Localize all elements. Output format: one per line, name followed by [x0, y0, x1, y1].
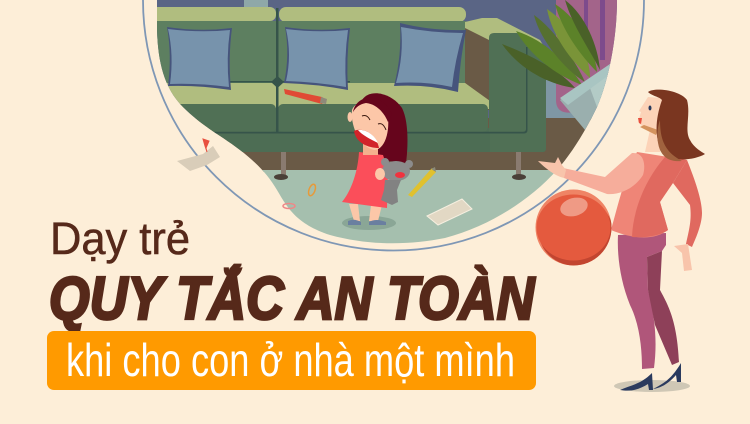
- scene: living room: [150, 0, 630, 250]
- cushion 2: [284, 27, 350, 90]
- girl ear: [348, 112, 352, 122]
- sofa: [150, 7, 546, 180]
- legs: [281, 152, 286, 176]
- woman hair highlight: [657, 120, 682, 161]
- woman eye: [648, 106, 652, 110]
- woman hand: [674, 244, 692, 271]
- cushion 1: [167, 27, 232, 90]
- olive seat right overlap: [465, 83, 471, 88]
- paper clip pink: [283, 204, 295, 208]
- paper clip: [307, 183, 317, 197]
- woman back leg: [647, 251, 679, 365]
- back line circle: [143, 0, 644, 250]
- woman mouth: [638, 118, 642, 124]
- girl neck: [363, 143, 378, 155]
- woman: [538, 90, 705, 392]
- wall: [150, 0, 630, 120]
- woman shadow: [614, 380, 690, 392]
- subtitle text: khi cho con ở nhà một mình: [66, 334, 515, 386]
- crumpled paper: [427, 199, 472, 225]
- skirting panel: [546, 80, 606, 120]
- woman shoes: [620, 373, 653, 391]
- arm top: [465, 18, 542, 44]
- girl eyes: [362, 116, 386, 130]
- sofa frame: [208, 128, 546, 152]
- title line 1: Dạy trẻ: [50, 213, 190, 264]
- woman front hand: [538, 157, 566, 178]
- girl: [342, 93, 407, 225]
- girl dress: [342, 152, 388, 208]
- red pencil: [284, 89, 327, 104]
- rug floor: [262, 170, 554, 244]
- girl hand: [375, 168, 385, 180]
- woman front leg: [618, 233, 666, 369]
- woman hair: [648, 90, 705, 159]
- girl shoes: [348, 220, 386, 225]
- woman front arm: [563, 153, 644, 194]
- girl shadow: [342, 216, 396, 230]
- title line 2: QUY TẮC AN TOÀN: [49, 265, 536, 332]
- window strip: [244, 0, 268, 7]
- front seam line: [214, 47, 528, 134]
- arm side: [465, 28, 490, 110]
- seat cushions: [166, 83, 276, 108]
- sofa back top: [150, 7, 276, 21]
- girl face: [352, 101, 388, 150]
- teddy bear: [381, 158, 413, 205]
- torn paper with pin: [177, 139, 220, 171]
- girl mouth: [354, 130, 379, 148]
- seat fronts: [180, 104, 276, 132]
- flower pot: [560, 64, 610, 130]
- woman torso: [611, 152, 687, 238]
- floor back: [195, 118, 592, 172]
- yellow pencil: [408, 167, 436, 197]
- curtain: [556, 0, 620, 113]
- girl legs: [349, 204, 382, 221]
- woman face: [638, 97, 662, 134]
- girl fringe: [353, 98, 392, 122]
- seams: [276, 8, 278, 132]
- woman neck: [645, 130, 662, 152]
- plant: [502, 0, 600, 88]
- cushion 3: [394, 23, 466, 92]
- woman back arm: [673, 160, 702, 247]
- ball: [536, 190, 612, 266]
- arm front: [489, 33, 546, 130]
- sofa back: [150, 21, 466, 83]
- subtitle banner: [47, 331, 536, 390]
- girl hair back: [362, 93, 407, 163]
- woman jaw shade: [640, 125, 658, 135]
